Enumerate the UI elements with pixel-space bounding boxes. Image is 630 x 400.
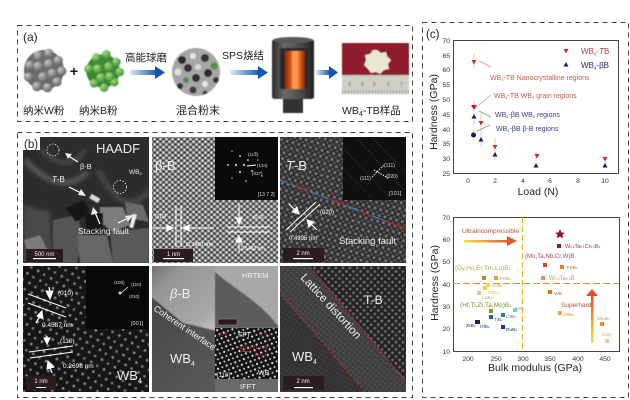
arrow: Ultraincompressible [462, 228, 519, 246]
labels and arrows: Stacking fault [78, 226, 130, 236]
series: WB4-betaB blue triangles [471, 114, 608, 168]
image: T-B lattice with stacking fault [278, 135, 408, 265]
inset: FFT pattern: [001] [131, 321, 144, 327]
label: Coherent interface: Coherent interface [152, 303, 218, 352]
label: WB4: WB [117, 368, 138, 383]
lattice spacing markers [153, 204, 270, 252]
panel: (a) synthesis workflow [18, 26, 412, 122]
y axis tick labels: 30 [442, 304, 450, 311]
data point labels: (Hf,Ti,Zr,Ta,Mo)B2 [460, 302, 511, 309]
lattice spacing markers: (110) [60, 338, 75, 345]
x axis tick labels: 250 [490, 356, 502, 363]
data point labels: FeB4 [567, 265, 578, 271]
icon: SPS furnace cylinder [272, 37, 314, 113]
inset: FFT and IFFT: [1 4 ] [259, 332, 271, 338]
inset: FFT and IFFT: (1 0 5) [238, 345, 252, 350]
data point labels: OsB [602, 332, 611, 338]
data point labels: LuB12 [482, 295, 494, 301]
legend: WB [581, 47, 594, 56]
data points [475, 229, 609, 343]
annotations: -βB WB [509, 112, 533, 119]
label: Lattice distortion: Lattice distortion [298, 272, 363, 342]
image: WB4-TB sample with ruler: 3 [348, 82, 351, 88]
data point labels: W0.6Ta0.1Cr0.3B4 [565, 244, 600, 250]
labels and arrows [47, 144, 142, 236]
y axis ticks and labels: 50 [442, 97, 450, 104]
arrow: ball milling [130, 66, 165, 79]
label: beta-B: β-B [155, 158, 175, 173]
arrow: Ultraincompressible: Ultraincompressible [462, 228, 519, 235]
labels and arrows: WB [129, 169, 139, 176]
x axis tick labels: 6 [548, 178, 552, 185]
inset: FFT pattern: [13 7 2] [258, 192, 275, 198]
inset: FFT pattern: [101] [389, 191, 402, 197]
data point labels: ZrB12 [488, 290, 499, 296]
image: WB4-TB sample with ruler [342, 43, 409, 94]
lattice spacing markers: (020) [320, 210, 334, 216]
arrow: SPS sintering [230, 66, 268, 79]
x axis tick labels: 450 [599, 356, 611, 363]
y axis ticks and labels: 65 [442, 53, 450, 60]
inset: FFT and IFFT: β-B [220, 332, 229, 338]
panel: (b) microstructure images [18, 132, 412, 398]
y axis ticks and labels: 25 [442, 171, 450, 178]
lattice spacing markers: (1.2460 nm) [186, 242, 213, 248]
label: WB4: 4 [138, 378, 142, 385]
panel: (c) mechanical properties [422, 22, 628, 398]
label: Stacking fault: Stacking fault [339, 236, 396, 247]
data point labels: Os2B3 [597, 316, 610, 322]
legend [564, 47, 609, 70]
scale bar: 2 nm: 2 nm [296, 251, 310, 257]
annotations: -TB WB [508, 93, 532, 100]
inset: FFT pattern: (020) [386, 174, 398, 180]
icon: nano B powder cluster [84, 50, 124, 92]
inset: FFT pattern: (111) [384, 163, 395, 169]
x axis tick labels: 0 [466, 178, 470, 185]
y axis tick labels: 10 [442, 349, 450, 356]
legend: -βB [596, 61, 609, 70]
data point labels: W0.4Ta0.6B [549, 276, 575, 282]
label: WB4-TB sample: -TB样品 [363, 104, 401, 117]
inset: FFT pattern: (100) [114, 280, 125, 285]
data point labels: MoB2 [491, 283, 503, 289]
icon: mixed powder sphere [172, 48, 220, 96]
arrow: Superhard [561, 289, 598, 343]
data point labels: (Dy,Ho,Er,Tm,Lu)B2 [455, 265, 510, 272]
series: WB4-TB red triangles [471, 60, 608, 162]
annotations: 4 [505, 95, 508, 100]
inset: FFT pattern: (113) [248, 152, 259, 157]
image: WB4-TB sample with ruler: 4 [361, 82, 364, 88]
x axis tick labels [462, 356, 611, 363]
x axis tick labels: 2 [493, 178, 497, 185]
inset: FFT pattern: (010) [129, 294, 140, 299]
image: HAADF overview: (b) [24, 139, 38, 151]
data point labels: HfB2 [480, 324, 490, 330]
label: T-B: T-B [364, 293, 383, 307]
data point labels [455, 244, 611, 338]
lattice spacing markers: 0.2698 nm [63, 363, 94, 370]
annotations: WB [496, 126, 507, 133]
annotations: 4 [501, 77, 504, 82]
label: WB4: 4 [313, 359, 317, 366]
label: nano B powder: 纳米B粉 [79, 104, 118, 117]
label: nano W powder: 纳米W粉 [23, 104, 65, 117]
legend: -TB [596, 47, 609, 56]
labels and arrows: T-B [52, 175, 65, 184]
y axis title: Hardness (GPa) [429, 245, 441, 321]
lattice spacing markers: (0-3) [253, 215, 264, 221]
annotations: 4 [532, 95, 535, 100]
y axis ticks and labels [442, 38, 450, 178]
inset: FFT pattern: (134) [257, 163, 268, 168]
y axis ticks and labels: 35 [442, 141, 450, 148]
lattice spacing markers: (010) [58, 290, 73, 297]
lattice spacing markers: 0.5482 nm [241, 246, 265, 252]
arrow: to sample [316, 66, 338, 79]
legend: 4 [594, 66, 597, 70]
icon: nano W powder cluster [24, 49, 66, 92]
data point labels: WB [554, 291, 562, 297]
scale bar: 500 nm: 500 nm [34, 252, 55, 258]
y axis ticks and labels: 55 [442, 82, 450, 89]
lattice spacing markers: 0.4395 nm [289, 236, 317, 242]
chart: hardness vs load [428, 38, 618, 198]
label: WB4-TB sample: 4 [359, 111, 363, 118]
reference lines at 300 GPa and 40 GPa [453, 217, 619, 351]
x axis tick labels: 200 [462, 356, 474, 363]
image: lattice distortion at T-B / WB4 boundary [278, 264, 408, 394]
heading: HAADF: HAADF [96, 141, 140, 156]
image: beta-B lattice with FFT [150, 135, 280, 265]
inset: FFT pattern: (027) [252, 171, 263, 176]
lattice spacing markers: 0.4587 nm [42, 322, 73, 329]
image: HAADF overview [23, 137, 149, 263]
label: WB4: 4 [191, 361, 195, 368]
scale bar: 1 nm: 1 nm [167, 252, 180, 258]
y axis tick labels: 40 [442, 282, 450, 289]
legend: WB [581, 61, 594, 70]
panel label (c): (c) [426, 29, 440, 41]
annotations: regions [535, 112, 560, 119]
y axis tick labels [442, 215, 450, 356]
label: T-B: T-B [286, 158, 307, 173]
inset: FFT pattern [215, 137, 278, 200]
data point labels: CrB2 [506, 314, 516, 320]
label: WB4-TB sample: WB [342, 105, 359, 117]
label: WB4: WB [170, 351, 191, 366]
image: WB4 lattice with FFT [21, 264, 151, 394]
inset: FFT and IFFT: WB [258, 370, 270, 377]
y axis ticks and labels: 30 [442, 156, 450, 163]
image: WB4-TB sample with ruler: 6 [387, 82, 390, 88]
x axis title: Bulk modulus (GPa) [488, 362, 582, 374]
annotations [477, 61, 590, 133]
chart: hardness vs bulk modulus [429, 215, 620, 374]
inset: FFT pattern: (110) [131, 282, 142, 287]
image: WB4-TB sample with ruler: 7 [400, 82, 403, 88]
labels and arrows: β-B [80, 162, 92, 171]
inset: FFT and IFFT: (0 0 1) [255, 352, 269, 357]
inset: FFT and IFFT [215, 328, 278, 392]
y axis ticks and labels: 60 [442, 67, 450, 74]
inset: FFT pattern [343, 137, 406, 200]
plus sign: + [70, 63, 78, 79]
lattice spacing markers [28, 287, 94, 373]
y axis ticks and labels: 70 [442, 38, 450, 45]
panel label (b) [23, 137, 40, 150]
y axis tick labels: 20 [442, 326, 450, 333]
x axis title: Load (N) [518, 186, 558, 198]
error bars [474, 54, 605, 168]
annotations: grain regions [534, 93, 577, 100]
annotations: 4 [507, 128, 510, 133]
inset: FFT and IFFT: [110] [217, 373, 230, 379]
inset: FFT pattern: (111) [360, 176, 371, 182]
panel label (a): (a) [23, 30, 38, 44]
y axis title: Hardness (GPa) [428, 74, 440, 150]
y axis ticks and labels: 45 [442, 112, 450, 119]
image: coherent interface with HRTEM and FFT insets [150, 264, 278, 392]
label: WB4: WB [292, 349, 313, 364]
label: mixed powder: 混合粉末 [176, 103, 220, 117]
x axis tick labels: 8 [576, 178, 580, 185]
data point labels: (Mo,Ta,Nb,Cr,W)B [525, 253, 574, 260]
annotations: 4 [506, 114, 509, 119]
y axis tick labels: 50 [442, 259, 450, 266]
x axis tick labels: 400 [572, 356, 584, 363]
x axis tick labels [466, 178, 609, 185]
data point labels: ZrB2 [466, 323, 476, 329]
inset: FFT and IFFT: IFFT [240, 382, 256, 391]
annotations: WB [490, 75, 501, 82]
label: beta-B: β-B [169, 286, 190, 301]
annotations: -βB β-B regions [510, 126, 559, 133]
labels and arrows: 4 [139, 171, 142, 176]
annotations: 4 [533, 114, 536, 119]
label: SPS sintering: SPS烧结 [222, 49, 264, 62]
annotations: WB [494, 93, 505, 100]
label: high-energy ball milling: 高能球磨 [125, 51, 167, 64]
y axis tick labels: 60 [442, 237, 450, 244]
data point labels: FeB4 [500, 276, 511, 282]
arrow: Superhard: Superhard [561, 302, 592, 309]
inset: FFT pattern [86, 266, 149, 329]
data point labels: OsB2 [563, 312, 574, 318]
annotations: -TB Nanocrystalline regions [504, 75, 590, 82]
x axis tick labels: 4 [521, 178, 525, 185]
lattice spacing markers [286, 202, 334, 242]
data point labels: VB2 [516, 306, 524, 312]
lattice spacing markers: (111) [155, 214, 166, 220]
scale bar: 2 nm: 2 nm [296, 379, 310, 385]
inset: FFT and IFFT: FFT [238, 332, 252, 339]
data point labels: TiB2 [494, 317, 503, 323]
legend: 4 [594, 52, 597, 56]
data point labels: RuB2 [506, 327, 517, 333]
image: WB4-TB sample with ruler: 5 [373, 82, 376, 88]
y axis tick labels: 70 [442, 215, 450, 222]
x axis tick labels: 350 [544, 356, 556, 363]
x axis tick labels: 300 [517, 356, 529, 363]
inset: FFT and IFFT: (1 1 0) [254, 345, 268, 350]
y axis ticks and labels: 40 [442, 127, 450, 134]
inset: HRTEM: HRTEM [242, 271, 269, 280]
x axis tick labels: 10 [601, 178, 609, 185]
scale bar: 1 nm: 1 nm [34, 379, 48, 385]
annotations: WB [495, 112, 506, 119]
